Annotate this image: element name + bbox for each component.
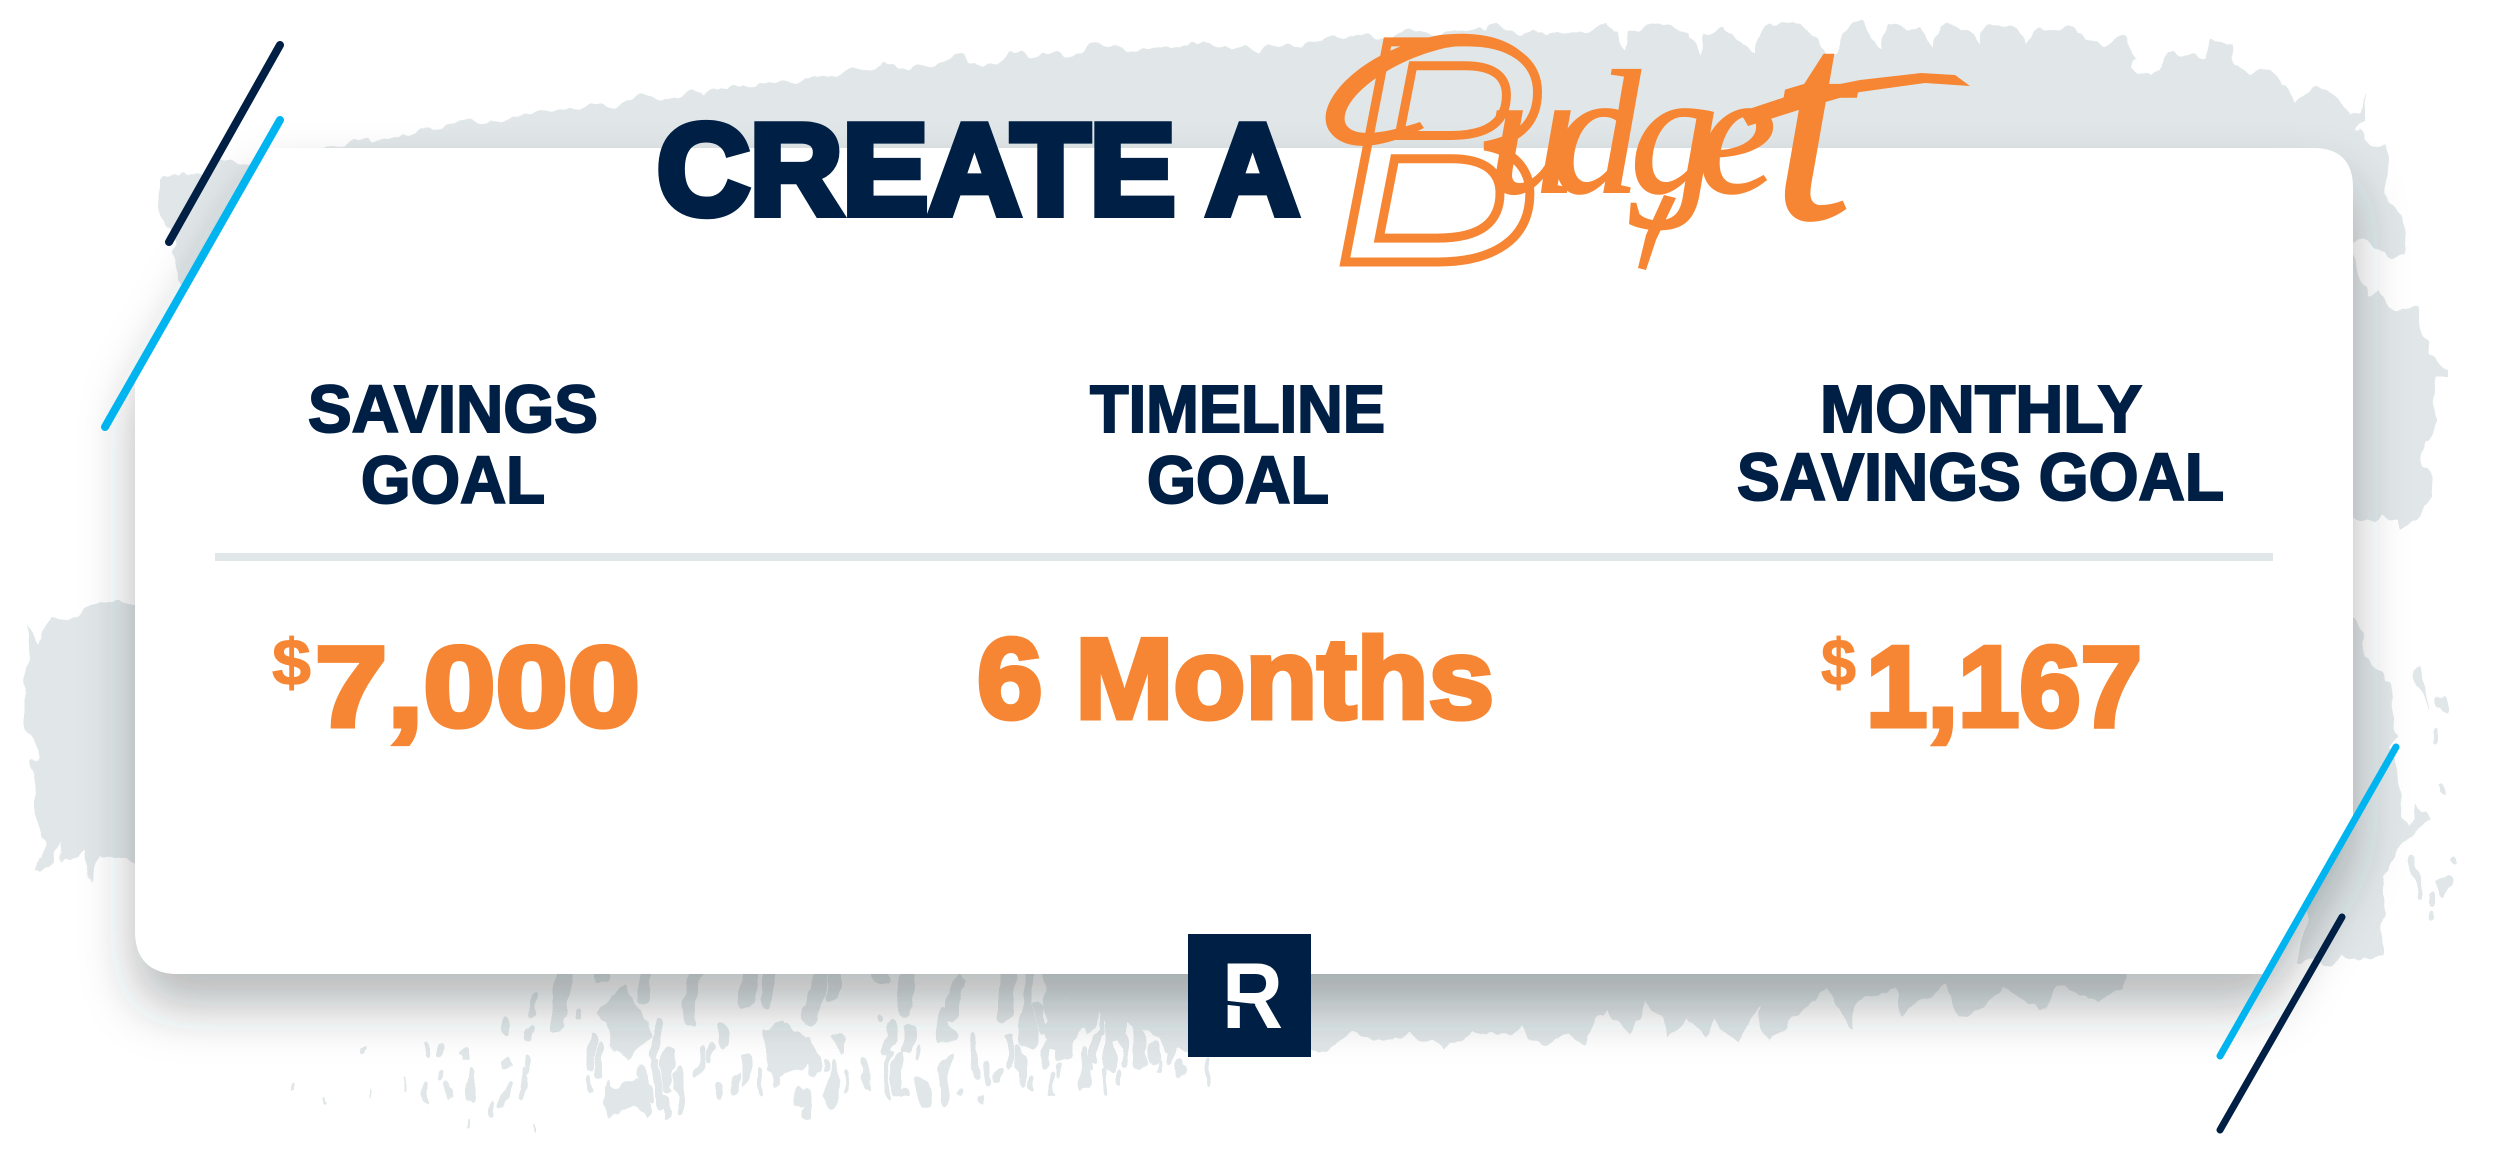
title <box>657 0 1970 330</box>
column header: monthly savings goal <box>1737 372 2224 515</box>
panel: white budget card with cut corners <box>135 148 2353 974</box>
column header: timeline goal: TIMELINE <box>1090 372 1385 447</box>
value: monthly savings goal: 1,167 <box>1866 624 2142 751</box>
divider <box>215 553 2273 561</box>
accent lines: bottom right <box>2220 747 2396 1130</box>
column header: timeline goal <box>1090 372 1385 518</box>
icon: logo badge <box>1188 934 1311 1057</box>
decorative brush swash: loop <box>1326 34 1538 146</box>
column header: monthly savings goal: SAVINGS GOAL <box>1737 440 2224 515</box>
icon: logo badge: R <box>1222 943 1283 1048</box>
value: monthly savings goal: $ <box>1821 625 1856 699</box>
value: savings goal: $ <box>272 625 311 699</box>
decorative brush swash: tail <box>1638 195 1676 270</box>
decorative brush swash: crossbar <box>1740 73 1970 126</box>
column header: savings goal: GOAL <box>361 443 545 518</box>
column header: savings goal: SAVINGS <box>308 372 598 447</box>
column header: timeline goal: GOAL <box>1147 443 1329 518</box>
title: create a: CREATE A <box>657 98 1299 242</box>
title: budget script word: udge <box>1488 36 1776 231</box>
column header: monthly savings goal: MONTHLY <box>1820 372 2142 447</box>
value: timeline goal: 6 Months <box>977 616 1494 743</box>
column header: savings goal <box>308 372 598 518</box>
title: budget script word <box>1326 0 1970 330</box>
accent lines: top left <box>105 45 280 427</box>
value: savings goal: 7,000 <box>315 624 640 751</box>
